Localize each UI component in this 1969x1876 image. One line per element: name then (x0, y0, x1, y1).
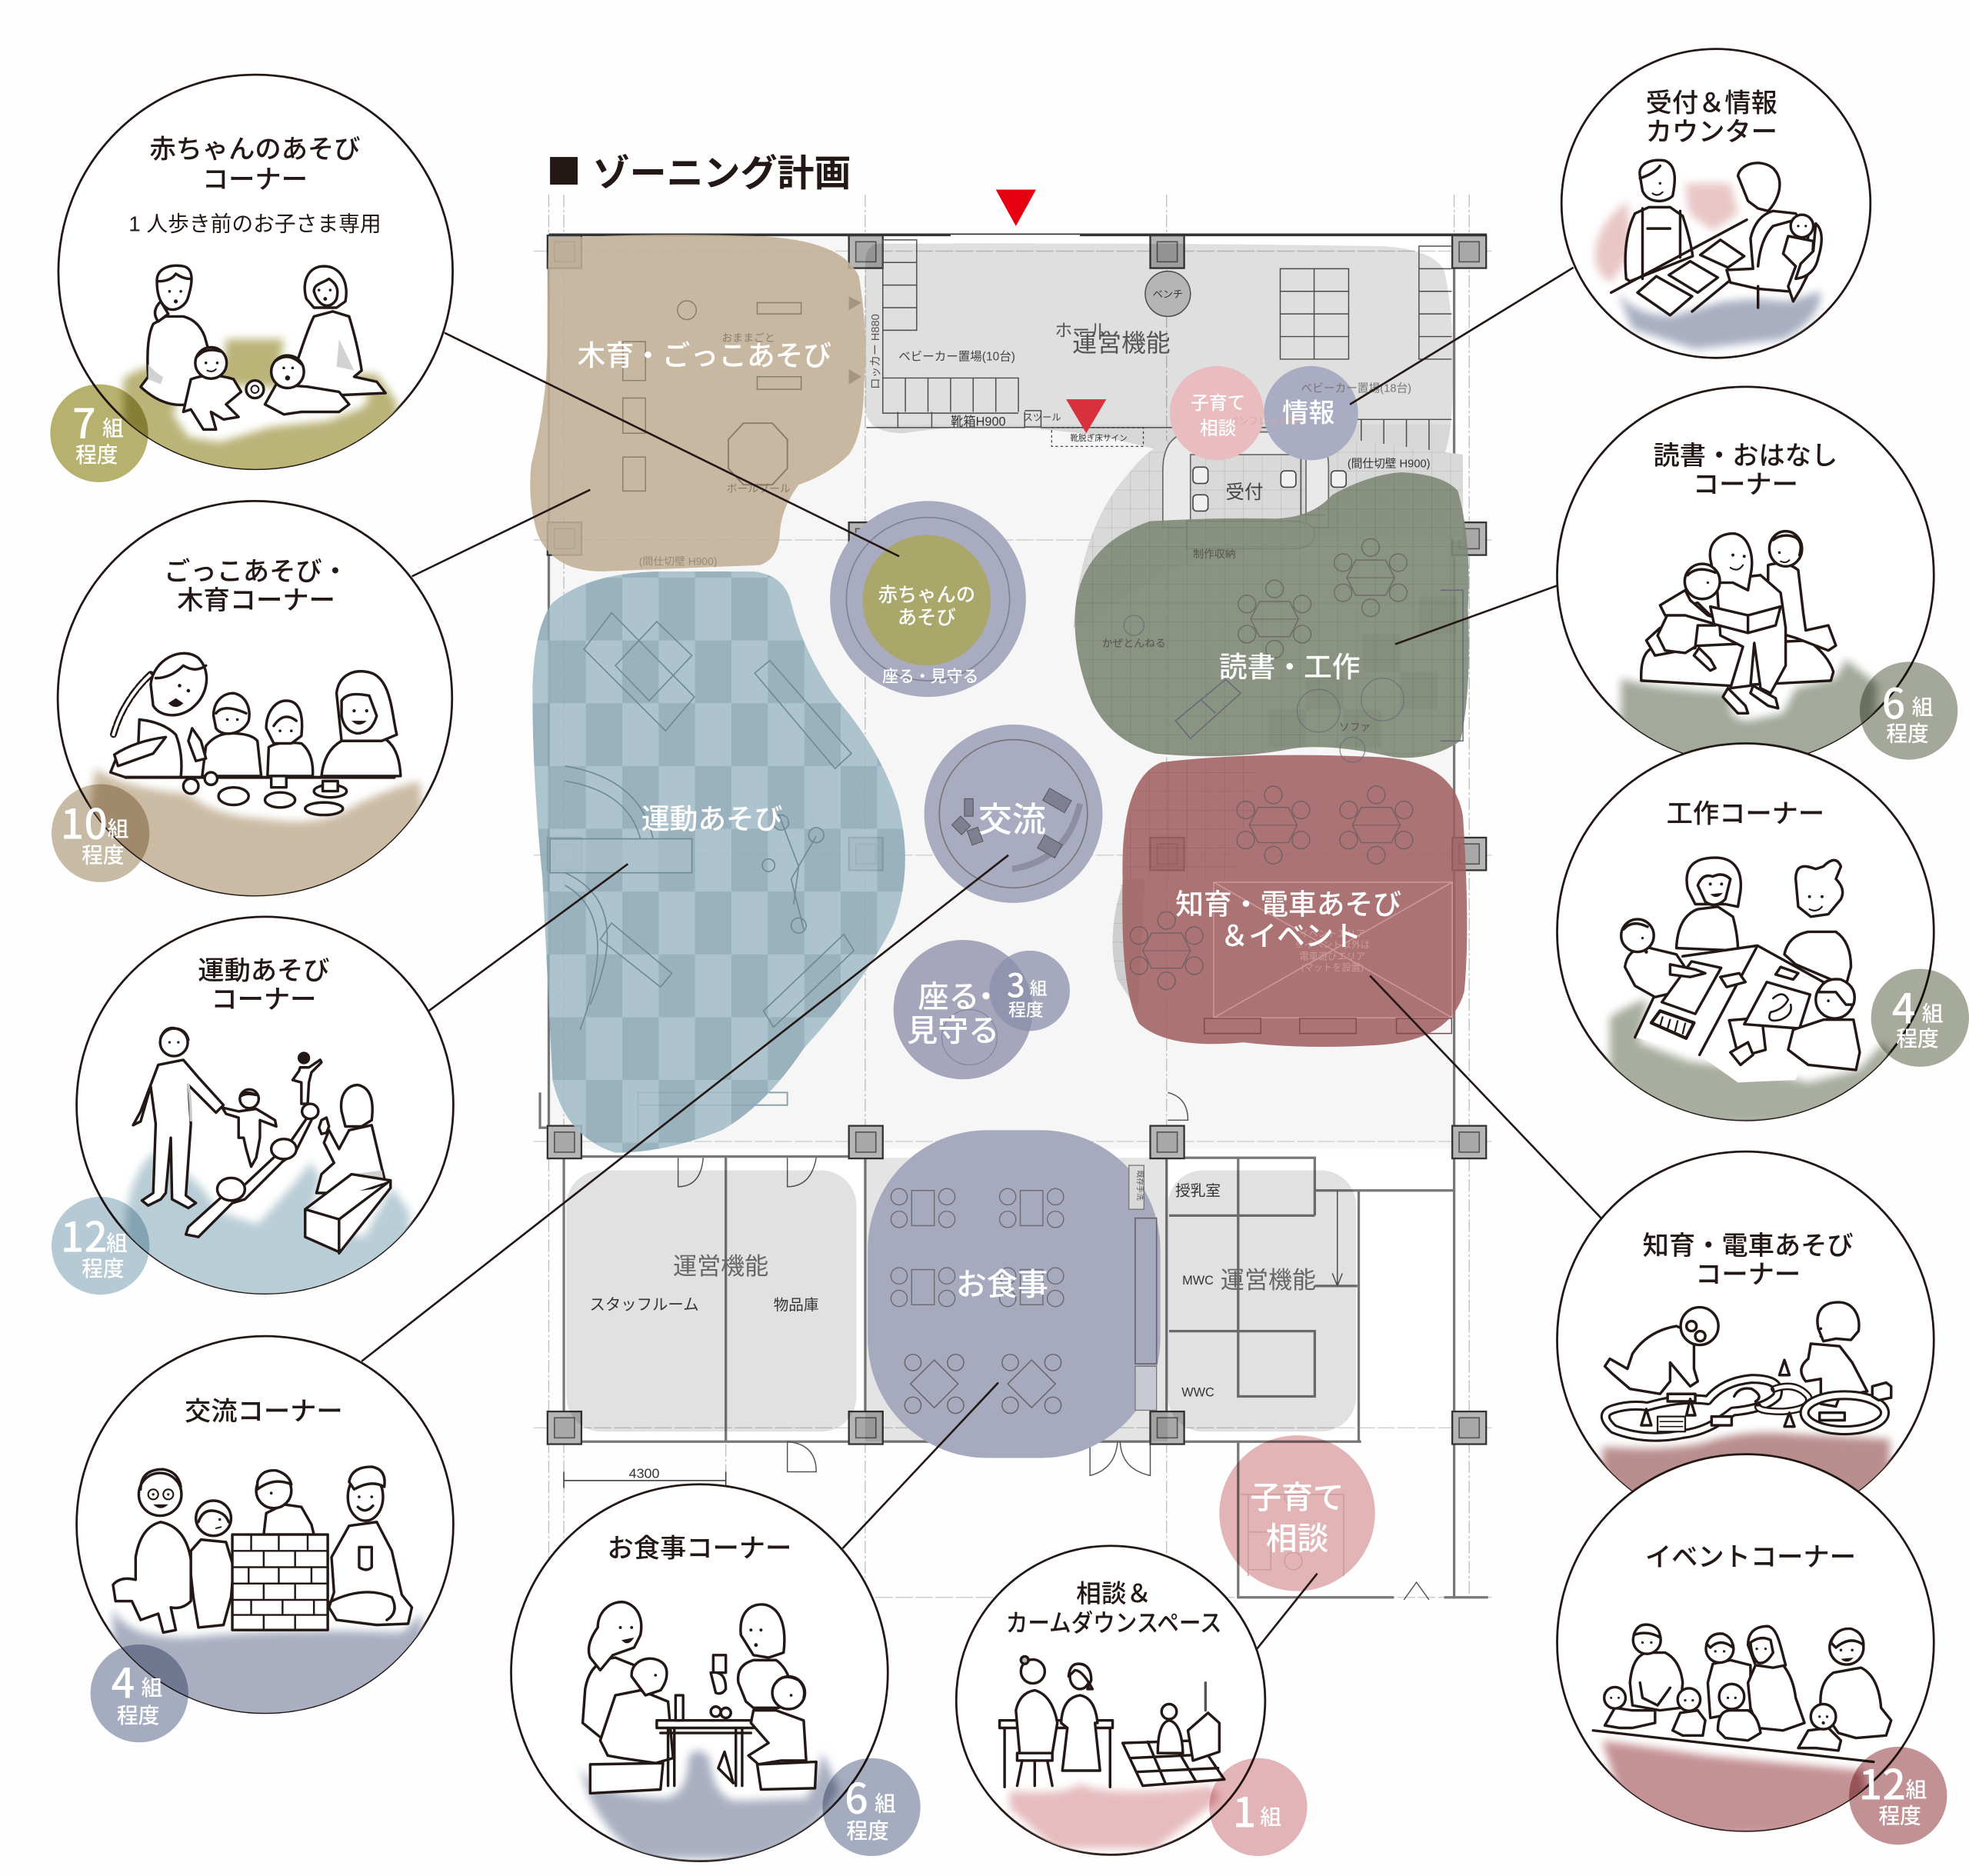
zone: learning, trains and events (1122, 755, 1467, 1047)
badge: 7 groups: 組 (102, 417, 124, 441)
physical play furniture (550, 613, 854, 1030)
capacity: sit and watch: 程度 (1008, 1000, 1044, 1020)
floor tint: slate (580, 1751, 839, 1858)
badge: 10 groups: 組 (108, 817, 128, 841)
zone label: sit and watch (907, 980, 1001, 1048)
floor tint: olive grey (1610, 1000, 1896, 1124)
plan small labels: かぜとんねる (1102, 637, 1166, 649)
zone: mini consultation (1170, 366, 1264, 460)
zone label: consultation: 子育て (1250, 1480, 1344, 1515)
heading: operations (hall): 運営機能 (1072, 329, 1171, 357)
zone label: sit and watch: 座る・ (918, 980, 1001, 1014)
badge: 6 groups right: 程度 (1886, 721, 1929, 745)
badge: 12 groups left: 組 (106, 1231, 128, 1255)
badge: 6 groups bottom: 6 (845, 1766, 868, 1826)
panel: physical play corner (77, 917, 453, 1312)
heading: 受付＆情報 (1646, 88, 1777, 118)
zone label: baby play: あそび (898, 607, 956, 628)
heading: カームダウンスペース (1006, 1609, 1222, 1637)
subtitle: 1 人歩き前のお子さま専用 (128, 212, 381, 235)
plan small labels: ※イベント以外は (1294, 940, 1370, 951)
zone: exchange (925, 725, 1102, 903)
zone label: information: 情報 (1282, 399, 1334, 428)
plan small labels (589, 288, 1431, 1481)
floor tint: pink and slate (1594, 183, 1821, 349)
plan small labels: 電車遊びエリア (1299, 950, 1365, 961)
panel: baby play corner (58, 75, 453, 484)
panel: dining corner (511, 1484, 888, 1861)
heading (198, 956, 330, 1015)
heading: operations (restrooms): 運営機能 (1221, 1267, 1316, 1294)
plan small labels: ベビーカー置場(10台) (898, 350, 1015, 364)
zone label: physical play: 運動あそび (641, 804, 783, 835)
illustration: crafting at table (1621, 858, 1860, 1082)
heading: ごっこあそび・ (164, 557, 348, 586)
zone: baby play centre (863, 535, 991, 665)
badge: 12 groups left: 12 (61, 1205, 108, 1265)
badge: 7 groups: 程度 (75, 443, 118, 467)
column grid (548, 235, 581, 268)
zone label: baby play: 赤ちゃんの (878, 585, 975, 606)
heading: 相談＆ (1076, 1579, 1151, 1608)
zone: dining side band (865, 1158, 1168, 1441)
plan small labels: (間仕切壁 H900) (639, 555, 717, 568)
plan small labels: ソファ (1339, 721, 1371, 733)
zone label: learning and trains: 知育・電車あそび (1175, 889, 1401, 921)
plan small labels: (間仕切壁 H900) (1348, 457, 1431, 470)
plan small labels: スタッフルーム (589, 1296, 699, 1314)
floor tint: pink (1010, 1783, 1221, 1848)
floor tint: beige (75, 768, 433, 905)
zone: operations hall (865, 243, 1453, 455)
badge: 10 groups: 程度 (82, 844, 125, 868)
badge: 1 group: 1 (1233, 1779, 1256, 1839)
zone label: sit and watch ring: 座る・見守る (882, 668, 978, 686)
zone label: dining: お食事 (956, 1268, 1048, 1301)
capacity: sit and watch: 3 (1007, 960, 1025, 1007)
heading: 知育・電車あそび (1643, 1231, 1854, 1261)
heading: 赤ちゃんのあそび (149, 135, 360, 165)
panel: consultation and calm-down space (956, 1546, 1265, 1854)
hand wash fixtures (1129, 1165, 1144, 1209)
zone: consultation room (1219, 1435, 1375, 1591)
zone: staff rooms (566, 1171, 856, 1431)
floor tint: rose (1596, 1427, 1897, 1491)
heading: 工作コーナー (1667, 799, 1824, 828)
zone: information (1264, 366, 1358, 460)
panel: exchange corner (77, 1336, 453, 1723)
badge: 12 groups right: 程度 (1878, 1804, 1921, 1828)
heading: カウンター (1646, 118, 1777, 147)
zone: reception tile floor (1074, 433, 1463, 628)
illustration: caregivers with babies (141, 265, 385, 429)
illustration: families on floor (1593, 1624, 1891, 1762)
plan small labels: 靴脱ぎ床サイン (1070, 433, 1128, 443)
panel: pretend play and wooden toys corner (58, 501, 452, 905)
illustration: family at toy table (111, 653, 401, 815)
illustration: consultation and child on mat (1000, 1656, 1224, 1787)
zone label: mini consultation: 子育て (1191, 393, 1245, 414)
heading (164, 557, 348, 615)
heading: コーナー (1693, 471, 1798, 500)
illustration: parent reading to children (1641, 531, 1836, 713)
badge: 4 groups left (91, 1644, 188, 1742)
shelving and lockers (883, 240, 1018, 413)
badge: 4 groups left: 組 (142, 1676, 162, 1700)
capacity: sit and watch (1007, 960, 1048, 1020)
heading: コーナー (1695, 1261, 1801, 1290)
badge: 6 groups right (1860, 661, 1957, 760)
floor plan base (534, 195, 1492, 1601)
icon: main entrance arrow (996, 190, 1036, 226)
plan small labels: ベンチ (1153, 288, 1183, 300)
door swings (678, 1092, 1188, 1475)
plan small labels: MWC (1182, 1274, 1214, 1288)
illustration: families eating (583, 1602, 816, 1793)
badge: 6 groups bottom: 程度 (846, 1819, 889, 1843)
title: ゾーニング計画 (593, 154, 851, 195)
plan small labels: 4300 (629, 1466, 660, 1481)
badge: 7 groups: 7 (72, 391, 96, 451)
badge: 10 groups: 10 (61, 791, 108, 851)
badge: 4 groups left: 程度 (117, 1704, 159, 1728)
zone: sit and watch (894, 940, 1033, 1079)
reception counter and chairs (1163, 432, 1346, 548)
badge: 6 groups right: 6 (1882, 671, 1905, 731)
badge: 7 groups (50, 385, 148, 482)
plan small labels: パンフレット等 (1228, 415, 1298, 427)
badge: 12 groups left (52, 1197, 149, 1295)
plan small labels: ボールプール (727, 482, 791, 495)
zone: physical play with checker floor (528, 565, 917, 1155)
floor tint: rose (1602, 1741, 1871, 1836)
zone: baby play ring (830, 501, 1026, 697)
illustration: staff and visitor at counter (1611, 160, 1821, 315)
floor tint: blue (125, 1153, 410, 1312)
zone: reading and crafts (1068, 465, 1475, 766)
zone: tile grid overlay (1074, 433, 1463, 1011)
plan small labels: 靴箱H900 (951, 415, 1006, 428)
heading: 交流コーナー (185, 1398, 343, 1427)
badge: 1 group: 組 (1260, 1805, 1281, 1829)
floor tint: slate (113, 1608, 422, 1723)
zone: restrooms and nursing (1168, 1171, 1356, 1431)
panel: crafts corner (1557, 744, 1934, 1124)
badge: 4 groups right: 組 (1922, 1001, 1944, 1025)
badge: 12 groups left: 程度 (82, 1257, 125, 1281)
badge: 4 groups right: 4 (1892, 976, 1915, 1036)
badge: 4 groups right (1871, 969, 1969, 1067)
zone label: mini consultation: 相談 (1200, 418, 1236, 439)
badge: 12 groups right: 12 (1859, 1752, 1906, 1812)
plan small labels: WWC (1181, 1385, 1214, 1399)
capacity: sit and watch: 組 (1030, 978, 1048, 998)
zone label: learning and trains: ＆イベント (1221, 920, 1361, 951)
badge: 6 groups bottom (822, 1758, 921, 1856)
heading: コーナー (211, 985, 316, 1015)
illustration: train track play (1605, 1302, 1891, 1437)
badge: 6 groups bottom: 組 (875, 1791, 896, 1815)
heading: 読書・おはなし (1653, 442, 1837, 471)
zone: tile left of event area (1113, 879, 1145, 1011)
heading: コーナー (202, 165, 308, 195)
panel: reading and storytelling corner (1557, 387, 1934, 778)
badge: 12 groups right (1849, 1747, 1947, 1844)
badge: 10 groups (52, 785, 149, 882)
heading (1006, 1579, 1222, 1637)
heading: 運動あそび (198, 956, 330, 985)
heading: お食事コーナー (607, 1534, 791, 1563)
badge: 4 groups right: 程度 (1896, 1027, 1939, 1051)
icon: shoe area arrow (1066, 399, 1106, 433)
badge: 1 group (1209, 1758, 1308, 1856)
floor tint: olive grey (1614, 657, 1881, 753)
zone label: consultation (1250, 1480, 1344, 1557)
zone: dining (868, 1130, 1161, 1458)
illustration: families building block wall (113, 1467, 412, 1632)
plan small labels: 授乳室 (1175, 1182, 1221, 1199)
heading: 木育コーナー (177, 586, 335, 615)
zone label: baby play (878, 585, 975, 628)
zone: red tile overlay (1126, 756, 1256, 879)
heading (1653, 442, 1837, 500)
plan small labels: ロッカー H880 (870, 314, 882, 389)
badge: 6 groups right: 組 (1912, 695, 1933, 719)
zone label: exchange: 交流 (978, 801, 1046, 839)
zone: wooden toys and pretend play (530, 235, 865, 571)
baby ring lines (846, 518, 1010, 681)
plan small labels: 既存手洗 (1135, 1171, 1145, 1201)
plan small labels: イベントエリア (1299, 928, 1365, 939)
heading (1646, 88, 1777, 147)
plan small labels: ベビーカー置場(18台) (1301, 382, 1411, 395)
plan small labels: 制作収納 (1193, 548, 1235, 560)
exchange ring and sofas (939, 740, 1088, 888)
zone: sit and watch capacity bubble (990, 951, 1070, 1031)
plan furniture overlay (550, 296, 1463, 1576)
zone label: reading: 読書・工作 (1219, 651, 1361, 683)
leader lines (361, 268, 1601, 1649)
plan small labels: (マットを設置) (1301, 962, 1364, 973)
badge: 12 groups right: 組 (1906, 1778, 1927, 1801)
panel: reception and information counter (1561, 49, 1871, 358)
plan small labels: スツール (1024, 412, 1061, 423)
plan small labels: 物品庫 (774, 1297, 818, 1314)
plan small labels: おままごと (721, 332, 775, 344)
badge: 4 groups left: 4 (112, 1650, 135, 1710)
heading: イベントコーナー (1645, 1543, 1856, 1572)
zone label: sit and watch: 見守る (907, 1014, 999, 1048)
heading (149, 135, 360, 195)
zone label: mini consultation (1191, 393, 1245, 439)
plan small labels: 受付 (1225, 481, 1263, 503)
zone label: consultation: 相談 (1266, 1521, 1328, 1557)
plan small labels: ホール (1054, 321, 1108, 341)
zone label: learning and trains (1175, 889, 1401, 951)
heading (1643, 1231, 1854, 1290)
heading: operations (staff): 運営機能 (673, 1253, 768, 1280)
panel: learning and train play corner (1557, 1151, 1934, 1532)
floor tint: olive (123, 339, 397, 484)
consultation room detail (1241, 1494, 1344, 1576)
illustration: balance beam play (133, 1028, 391, 1253)
zone label: wooden toys: 木育・ごっこあそび (578, 340, 831, 372)
panel: event corner (1557, 1454, 1934, 1836)
